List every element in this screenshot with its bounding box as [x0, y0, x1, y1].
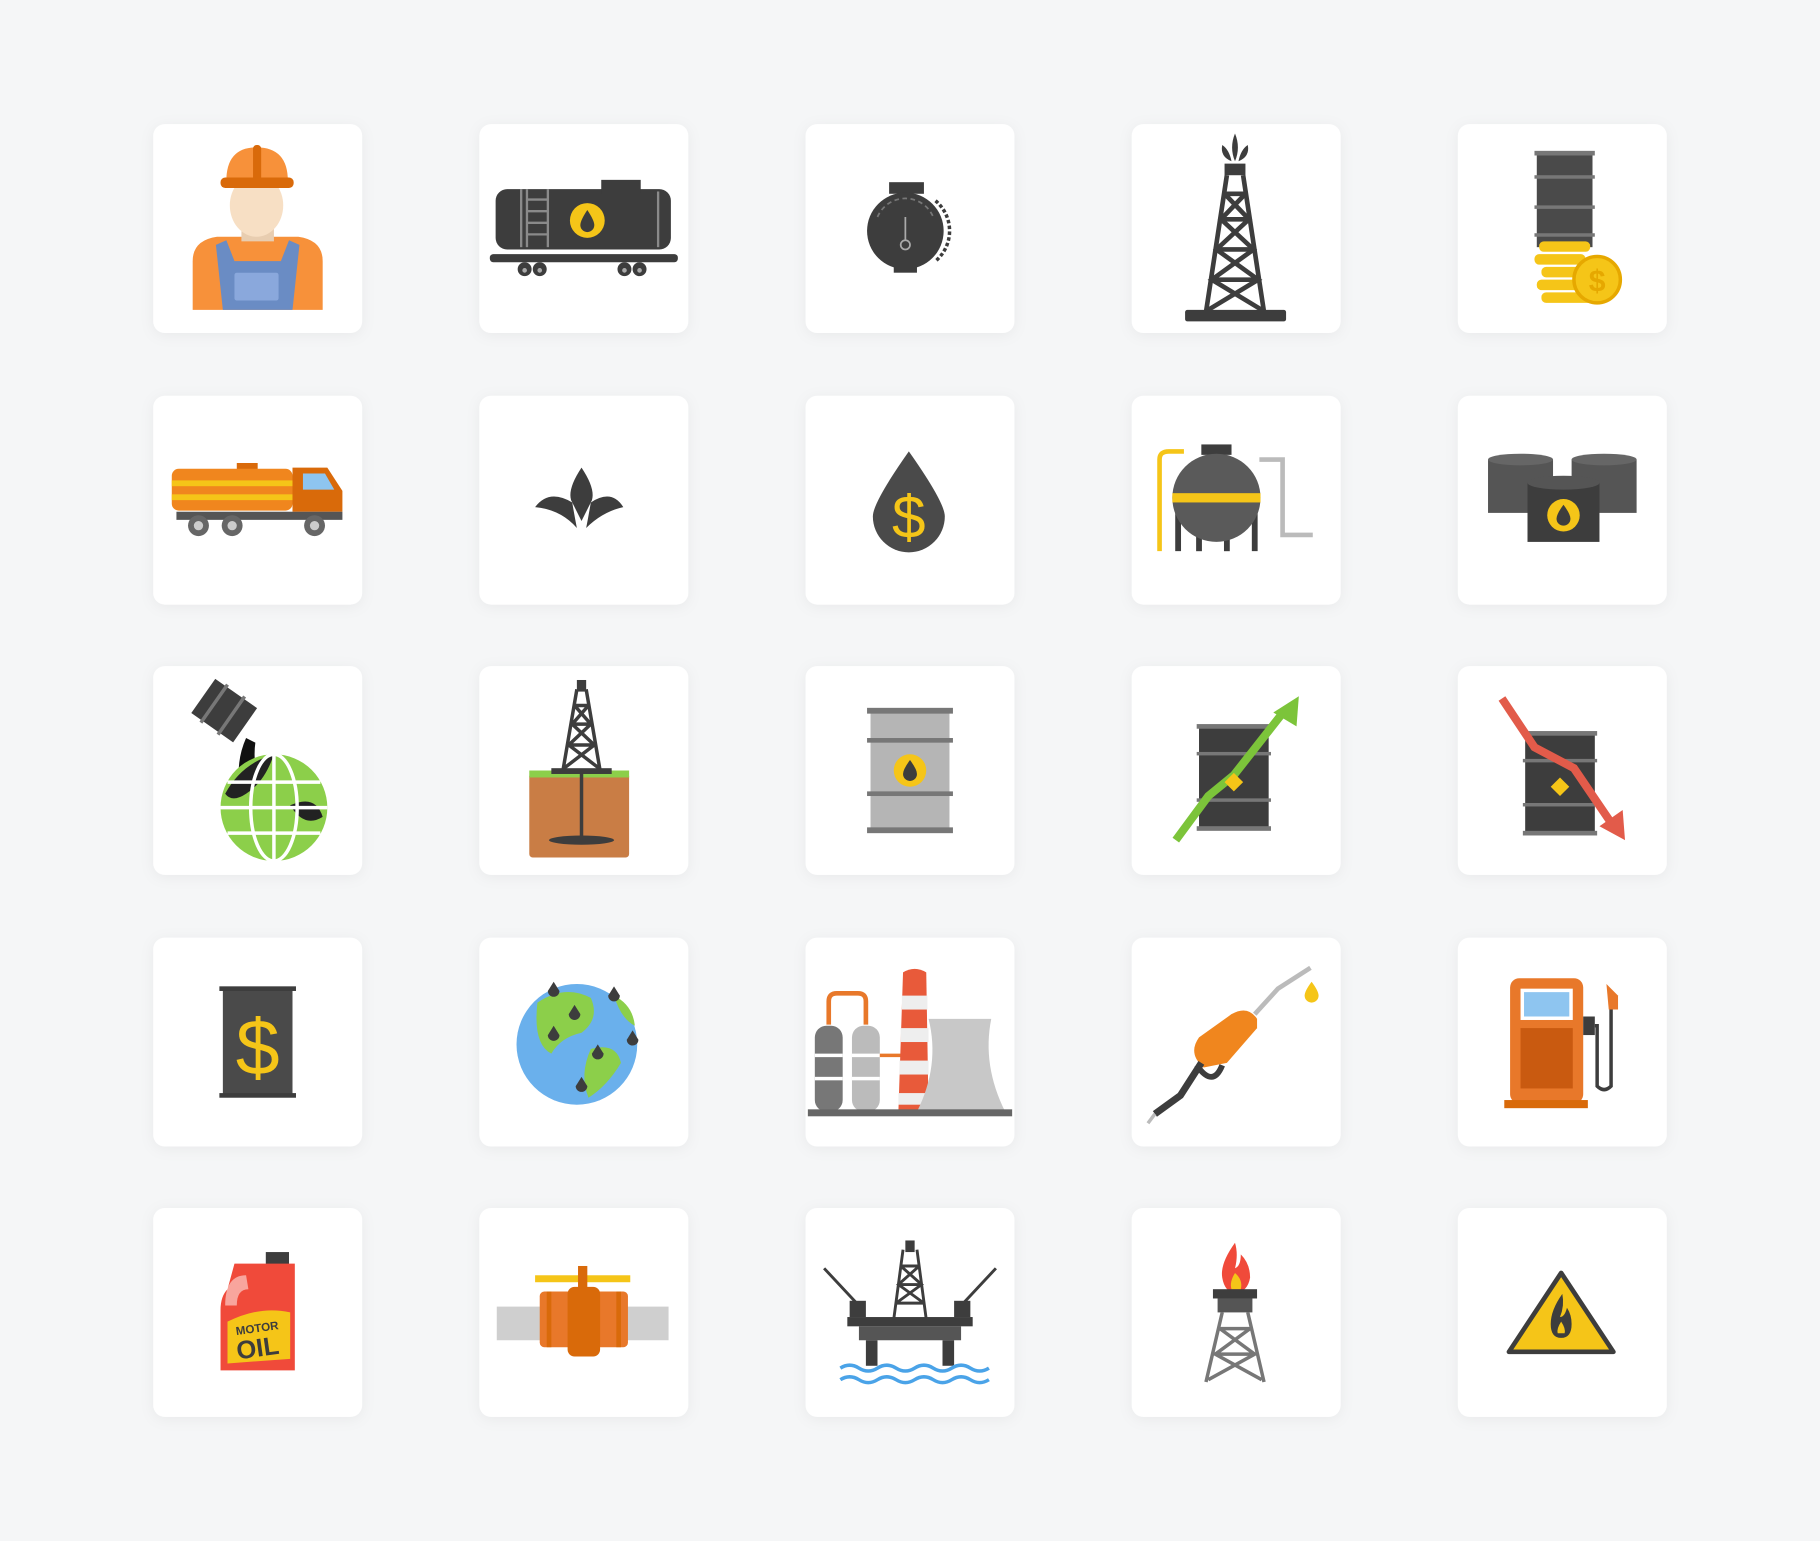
- icon: tank railcar: [490, 180, 678, 276]
- icon: barrels: [1488, 454, 1637, 542]
- card: refinery: [806, 938, 1014, 1146]
- card: flare tower: [1132, 1208, 1341, 1417]
- card: tanker truck: [153, 396, 362, 605]
- card: dollar barrel: [153, 938, 362, 1146]
- icon: globe with pouring barrel: [190, 677, 327, 861]
- icon: barrel falling: [1502, 699, 1625, 840]
- card: dollar drop: [806, 396, 1014, 605]
- icon: globe with drops: [517, 982, 638, 1105]
- card: globe pour: [153, 666, 362, 875]
- icon: derrick: [1185, 133, 1286, 321]
- icon: motor oil jug: MOTOR: [235, 1319, 280, 1338]
- icon: barrel rising: [1176, 696, 1299, 840]
- card: motor oil: [153, 1208, 362, 1417]
- icon: barrel with coins: [1534, 151, 1620, 303]
- icon: dollar barrel: $: [236, 1004, 280, 1092]
- icon: worker: [193, 145, 323, 310]
- card: flammable warning: [1458, 1208, 1667, 1417]
- icon: motor oil jug: [221, 1252, 295, 1370]
- card: price down: [1458, 666, 1667, 875]
- card: spherical tank: [1132, 396, 1341, 605]
- card: price up: [1132, 666, 1341, 875]
- icon: fuel nozzle: [1148, 968, 1319, 1123]
- card: pipe valve: [479, 1208, 688, 1417]
- icon: barrel: [867, 708, 953, 833]
- card: drilling well: [479, 666, 688, 875]
- icon: valve: [497, 1266, 669, 1356]
- card: tank railcar: [479, 124, 688, 333]
- icon: gas pump: [1504, 978, 1618, 1108]
- icon: splash: [535, 468, 623, 528]
- icon: storage sphere: [1160, 444, 1313, 551]
- card: pressure vessel: [806, 124, 1014, 333]
- card: globe oil: [479, 938, 688, 1146]
- icon: motor oil jug: OIL: [235, 1332, 281, 1365]
- icon: dollar barrel: [219, 986, 296, 1098]
- card: three barrels: [1458, 396, 1667, 605]
- card: oil derrick gusher: [1132, 124, 1341, 333]
- icon: warning sign: [1509, 1273, 1613, 1352]
- card: offshore rig: [806, 1208, 1014, 1417]
- icon: refinery: [808, 969, 1012, 1116]
- icon: oil drop dollar: $: [892, 482, 926, 550]
- icon: offshore rig: [824, 1240, 996, 1383]
- icon: barrel with coins: $: [1589, 265, 1606, 298]
- card: worker: [153, 124, 362, 333]
- icon: flare tower: [1206, 1243, 1264, 1382]
- card: oil splash: [479, 396, 688, 605]
- icon: oil drop dollar: [873, 451, 945, 552]
- card: gray barrel: [806, 666, 1014, 875]
- card: barrel and coins: [1458, 124, 1667, 333]
- card: fuel pump: [1458, 938, 1667, 1146]
- icon: drilling well: [529, 680, 629, 858]
- icon: tanker truck: [172, 463, 342, 536]
- card: fuel nozzle: [1132, 938, 1341, 1146]
- icon: pressure vessel: [867, 182, 950, 273]
